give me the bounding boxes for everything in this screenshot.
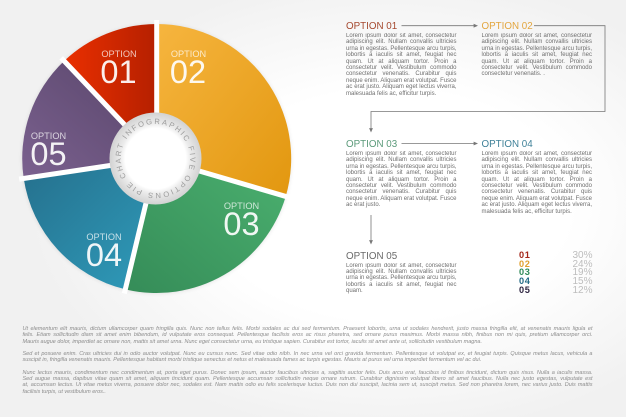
text option 03: consectetur venenatis. Curabitur quis — [346, 189, 456, 195]
text option 02: Lorem ipsum dolor sit amet, consectetur — [482, 33, 592, 39]
text option 01: malesuada felis ac, efficitur turpis. — [346, 91, 436, 97]
text option 03: ac erat justo. — [346, 202, 380, 208]
slice label 04: 04 — [86, 237, 122, 273]
heading option 03: OPTION 03 — [346, 139, 397, 150]
text option 03: neque enim. Aliquam erat volutpat. Fusce — [346, 196, 456, 202]
text option 04: urna in egestas. Pellentesque arcu turpis, — [482, 164, 592, 170]
slice label 05: OPTION — [31, 131, 66, 141]
text option 03: lobortis a iaculis sit amet, feugiat nec — [346, 170, 456, 176]
text option 01: urna in egestas. Pellentesque arcu turpis, — [346, 46, 456, 52]
percentage legend: 19% — [572, 267, 592, 278]
text option 04: lobortis a iaculis sit amet, feugiat nec — [482, 170, 592, 176]
slice label 03: OPTION — [224, 201, 259, 211]
slice 02 — [157, 24, 291, 196]
connector 02 to 03 — [370, 26, 605, 132]
text option 04: quam. Ut at aliquam tortor. Proin a — [482, 177, 592, 183]
text option 05: Lorem ipsum dolor sit amet, consectetur — [346, 262, 456, 268]
heading option 05: OPTION 05 — [346, 250, 397, 262]
text option 05: quam. — [346, 288, 363, 294]
footer paragraph 3: Nunc lectus mauris, condimentum nec condimentum at, porta eget purus. Donec sem ipsum, auctor faucibus ultricies a, sagittis auctor felis. Duis arcu erat, faucibus id finibus tincidunt, dictum quis risus. Nulla a iaculis massa. — [22, 370, 592, 376]
slice label 01: OPTION — [101, 49, 137, 59]
percentage legend: 01 — [519, 250, 531, 260]
text option 01: neque enim. Aliquam erat volutpat. Fusce — [346, 78, 456, 84]
text option 01: quam. Ut at aliquam tortor. Proin a — [346, 59, 456, 65]
text option 02: urna in egestas. Pellentesque arcu turpis, — [482, 46, 592, 52]
heading option 01: OPTION 01 — [346, 21, 397, 32]
slice label 02: 02 — [170, 54, 206, 90]
text option 03: adipiscing elit. Nullam convallis ultricies — [346, 157, 456, 163]
text option 03: consectetur velit. Vestibulum commodo — [346, 183, 456, 189]
heading option 02: OPTION 02 — [482, 21, 533, 32]
text option 01: Lorem ipsum dolor sit amet, consectetur — [346, 33, 456, 39]
text option 04: malesuada felis ac, efficitur turpis. — [482, 209, 572, 215]
text option 04: consectetur velit. Vestibulum commodo — [482, 183, 592, 189]
percentage legend: 02 — [519, 259, 531, 269]
text option 04: consectetur venenatis. Curabitur quis — [482, 189, 592, 195]
percentage legend: 30% — [572, 250, 592, 261]
text option 01: consectetur velit. Vestibulum commodo — [346, 65, 456, 71]
center ring with circular text: INFOGRAPHIC FIVE OPTIONS PIE CHART — [116, 118, 196, 198]
footer paragraph 1: Mauris augue dolor, imperdiet ac ornare non, mattis sit amet urna. Nunc eget consectetur urna, eu tristique sapien. Curabitur est tortor, iaculis sit amet ante ut, sollicitudin vestibulum magna. — [22, 339, 482, 345]
footer paragraph 1: Ut elementum elit mauris, dictum ullamcorper quam fringilla quis. Nunc non tellus felis. Morbi sodales ac dui sed fermentum. Praesent lobortis, urna ut sodales hendrerit, justo massa fringilla elit, at venenatis mauris ligula et — [22, 326, 592, 332]
text option 05: adipiscing elit. Nullam convallis ultricies — [346, 269, 456, 275]
slice label 05: 05 — [30, 136, 67, 172]
text option 04: adipiscing elit. Nullam convallis ultricies — [482, 157, 592, 163]
slice 01 — [64, 24, 157, 158]
footer paragraph 3: at, accumsan lectus. Ut vitae metus viverra, posuere dolor nec, sodales est. Nam mattis odio eu felis scelerisque luctus. Duis non dui suscipit, lacinia sem ut, suscipit metus. Sed non pharetra lorem, nec varius justo. Duis mattis — [22, 382, 592, 388]
footer paragraph 2: Sed et posuere enim. Cras ultricies dui in odio auctor volutpat. Nunc eu cursus nunc. Sed vitae odio nibh. In nec urna vel orci gravida fermentum. Pellentesque ut volutpat ex, et feugiat turpis. Quisque metus lacus, vehicula a — [22, 351, 592, 357]
slice label 02: OPTION — [171, 49, 206, 59]
slice label 03: 03 — [223, 206, 260, 242]
slice 04 — [24, 158, 157, 289]
arrow 01 to 02 — [402, 24, 477, 27]
footer paragraph 3 — [22, 370, 593, 395]
slice label 01: 01 — [100, 54, 137, 90]
arrow 03 to 04 — [402, 142, 477, 145]
text option 03: urna in egestas. Pellentesque arcu turpis, — [346, 164, 456, 170]
text option 05: lobortis a iaculis sit amet, feugiat nec — [346, 282, 456, 288]
text option 02: adipiscing elit. Nullam convallis ultricies — [482, 39, 592, 45]
slice label 04: OPTION — [86, 232, 122, 242]
text option 03: quam. Ut at aliquam tortor. Proin a — [346, 177, 456, 183]
slice 03 — [125, 158, 286, 293]
text option 04: Lorem ipsum dolor sit amet, consectetur — [482, 151, 592, 157]
footer paragraph 3: facilisis turpis, ut vestibulum eros.. — [22, 389, 106, 395]
text option 02 — [482, 33, 592, 77]
text option 01: lobortis a iaculis sit amet, feugiat nec — [346, 52, 456, 58]
arrow 03 to 05 — [370, 215, 372, 244]
percentage legend: 15% — [572, 276, 592, 287]
footer paragraph 1: felis. Etiam sollicitudin diam sit amet enim bibendum, id vulputate eros consequat. Pellentesque facilisis eros ac risus pharetra, sed ornare purus maximus. Morbi massa nibh, finibus non mi quis, pretium ullamcorper orci. — [22, 332, 592, 338]
text option 01: consectetur venenatis. Curabitur quis — [346, 71, 456, 77]
text option 03: Lorem ipsum dolor sit amet, consectetur — [346, 151, 456, 157]
footer paragraph 3: Sed augue massa, dapibus vitae quam sit amet, aliquam tincidunt quam. Pellentesque accumsan sollicitudin neque ornare rutrum. Curabitur dignissim volutpat libero sit amet faucibus. Nulla nec justo egestas, vulputate est — [22, 376, 592, 382]
percentage legend: 04 — [519, 276, 531, 286]
text option 02: quam. Ut at aliquam tortor. Proin a — [482, 59, 592, 65]
heading option 04: OPTION 04 — [482, 139, 533, 150]
text option 01: ac erat justo. Aliquam eget lectus viverra, — [346, 84, 456, 90]
slice 05 — [22, 61, 157, 178]
text option 02: consectetur venenatis. . — [482, 71, 545, 77]
text option 01 — [346, 33, 456, 97]
text option 04 — [482, 151, 592, 215]
text option 03 — [346, 151, 456, 208]
percentage legend: 05 — [519, 285, 531, 295]
footer paragraph 1 — [22, 326, 593, 345]
text option 02: consectetur velit. Vestibulum commodo — [482, 65, 592, 71]
text option 05 — [346, 262, 456, 294]
text option 02: lobortis a iaculis sit amet, feugiat nec — [482, 52, 592, 58]
text option 05: urna in egestas. Pellentesque arcu turpis, — [346, 275, 456, 281]
footer paragraph 2: suscipit in, fringilla venenatis mauris. Pellentesque habitant morbi tristique senectus et netus et malesuada fames ac turpis egestas. Mauris at purus vel urna imperdiet fermentum vel ac dui. — [22, 357, 481, 363]
percentage legend: 03 — [519, 267, 531, 277]
text option 01: adipiscing elit. Nullam convallis ultricies — [346, 39, 456, 45]
footer paragraph 2 — [22, 351, 592, 363]
percentage legend: 12% — [572, 285, 592, 296]
percentage legend: 24% — [572, 259, 592, 270]
text option 04: ac erat justo. Aliquam eget lectus viverra, — [482, 202, 592, 208]
text option 04: neque enim. Aliquam erat volutpat. Fusce — [482, 196, 592, 202]
